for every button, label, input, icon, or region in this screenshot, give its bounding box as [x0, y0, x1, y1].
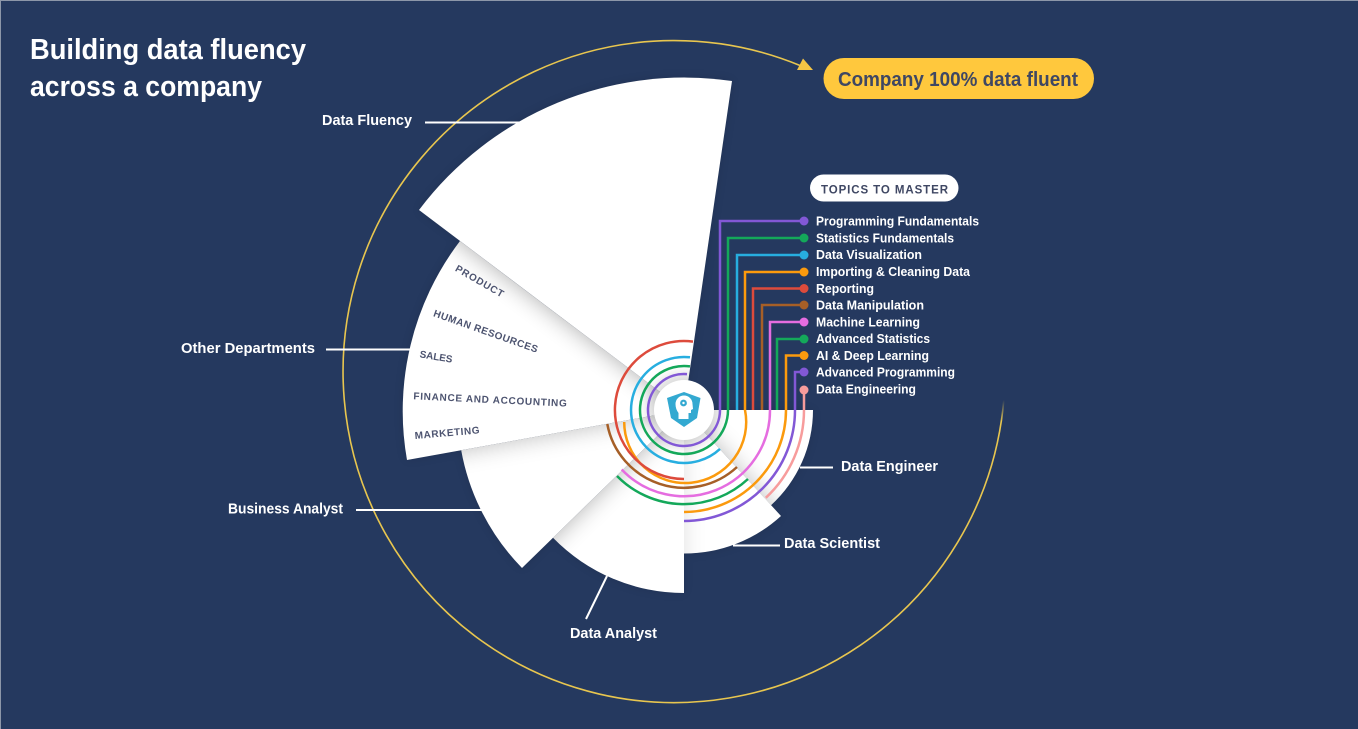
label: data scientist: Data Scientist: [784, 536, 880, 552]
callout: company 100% data fluent: [824, 58, 1094, 99]
label: business analyst: Business Analyst: [228, 502, 343, 518]
line: machine learning: [622, 322, 804, 496]
topic list: Advanced Programming: [816, 364, 955, 380]
topic list: Importing & Cleaning Data: [816, 264, 971, 279]
sector: data fluency: [419, 78, 732, 410]
topic list: Advanced Statistics: [816, 331, 930, 346]
heading: topics to master: TOPICS TO MASTER: [821, 184, 949, 196]
label: data analyst: Data Analyst: [570, 626, 657, 642]
topic list: Reporting: [816, 281, 874, 296]
department labels: PRODUCT: [453, 264, 505, 300]
department labels: MARKETING: [414, 425, 480, 442]
sector: data analyst: [553, 410, 684, 593]
topic list: [816, 214, 979, 396]
topic list: Data Engineering: [816, 382, 916, 396]
line: statistics fundamentals: [640, 238, 804, 454]
line: importing and cleaning data: [624, 272, 804, 483]
hub shadow: [644, 370, 724, 450]
sector: business analyst: [461, 410, 684, 568]
label: data analyst: [570, 576, 657, 642]
title: Building data fluency: [30, 34, 306, 66]
department labels: [413, 264, 567, 442]
line: reporting: [615, 288, 804, 479]
title: across a company: [30, 71, 262, 103]
callout: company 100% data fluent: Company 100% data fluent: [838, 69, 1078, 91]
sector: data engineer: [684, 410, 813, 505]
label: data engineer: Data Engineer: [841, 459, 938, 475]
topic lines and arcs: [607, 221, 804, 521]
soft halo under the fan: [403, 78, 813, 593]
department labels: FINANCE AND ACCOUNTING: [413, 391, 567, 410]
line: AI and deep learning: [684, 356, 804, 512]
heading: topics to master: [810, 174, 958, 202]
department labels: SALES: [419, 349, 453, 366]
line: programming fundamentals: [648, 221, 804, 446]
line: data manipulation: [607, 305, 804, 488]
topic list: Statistics Fundamentals: [816, 230, 954, 246]
icon: shield with head: [667, 392, 700, 427]
label: data fluency: Data Fluency: [322, 113, 412, 129]
title: [30, 34, 306, 103]
line: data visualization: [631, 255, 804, 463]
topic list: AI & Deep Learning: [816, 348, 929, 363]
topic list: Machine Learning: [816, 314, 920, 330]
department labels: HUMAN RESOURCES: [432, 308, 539, 356]
label: other departments: Other Departments: [181, 341, 315, 357]
topic dots: [800, 216, 808, 394]
sector: data scientist: [684, 410, 781, 554]
line: data engineering: [766, 389, 804, 498]
sector: other departments: [403, 241, 684, 460]
topic list: Data Manipulation: [816, 298, 924, 312]
line: advanced programming: [684, 372, 804, 521]
hub circle: [654, 380, 714, 440]
yellow progress ring with arrow: [343, 41, 1004, 703]
topic list: Data Visualization: [816, 247, 922, 262]
line: advanced statistics: [617, 339, 804, 504]
topic list: Programming Fundamentals: [816, 214, 979, 228]
